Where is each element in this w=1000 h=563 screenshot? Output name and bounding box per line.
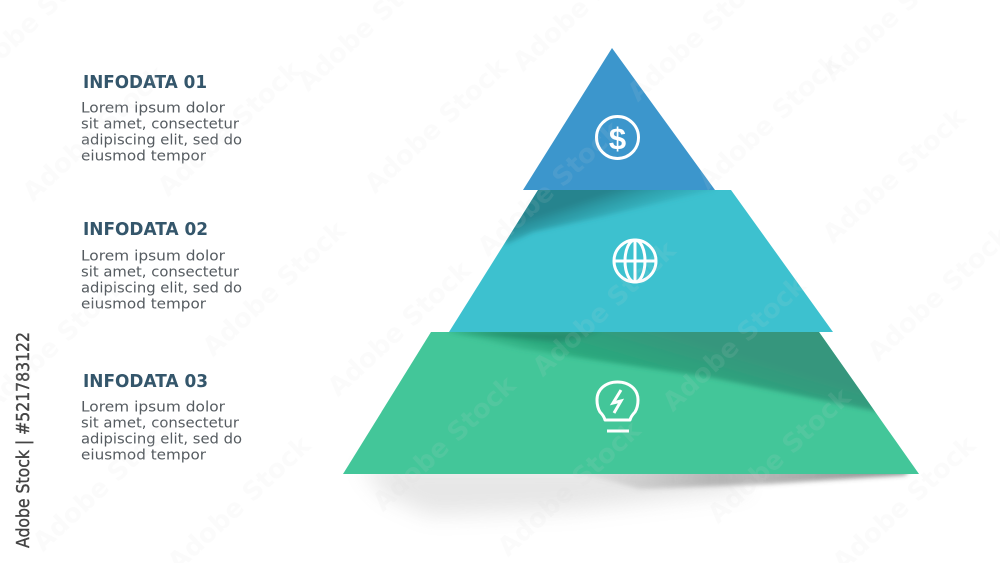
text block: infodata 01 <box>81 72 242 164</box>
watermarks: Adobe Stock <box>657 270 812 418</box>
text block: infodata 01: INFODATA 01 <box>83 72 207 93</box>
text block: infodata 02: INFODATA 02 <box>83 219 208 240</box>
text block: infodata 03: INFODATA 03 <box>83 371 208 392</box>
pyramid level 1: blue <box>523 48 715 190</box>
text block: infodata 02: adipiscing elit, sed do <box>81 280 242 296</box>
watermarks: Adobe Stock <box>152 55 307 203</box>
watermarks: Adobe Stock <box>197 215 352 363</box>
text block: infodata 03: adipiscing elit, sed do <box>81 432 242 448</box>
watermarks: Adobe Stock <box>702 382 857 530</box>
text block: infodata 01: sit amet, consectetur <box>81 116 239 132</box>
watermarks: Adobe Stock <box>322 255 477 403</box>
cast shadow on teal level <box>504 190 708 245</box>
icon: globe <box>614 240 656 282</box>
watermarks: Adobe Stock <box>527 235 682 383</box>
icon: dollar coin <box>596 116 638 158</box>
text block: infodata 01: adipiscing elit, sed do <box>81 132 242 148</box>
floor shadow <box>360 465 912 515</box>
icon: dollar coin: $ <box>609 121 626 156</box>
text block: infodata 03: eiusmod tempor <box>81 448 206 464</box>
text block: infodata 02: Lorem ipsum dolor <box>81 248 225 264</box>
vertical stock id label: Adobe Stock | #521783122 <box>13 332 34 548</box>
text block: infodata 03: Lorem ipsum dolor <box>81 400 225 416</box>
cast shadow on green level <box>449 325 880 412</box>
text block: infodata 03 <box>81 371 242 464</box>
watermarks: Adobe Stock <box>472 115 627 263</box>
icon: light bulb <box>597 382 638 431</box>
watermarks: Adobe Stock <box>359 52 514 200</box>
text block: infodata 02: sit amet, consectetur <box>81 264 239 280</box>
watermarks: Adobe Stock <box>17 60 172 208</box>
text block: infodata 01: eiusmod tempor <box>81 148 206 164</box>
watermarks: Adobe Stock <box>492 415 647 563</box>
text block: infodata 01: Lorem ipsum dolor <box>81 100 225 116</box>
watermarks: Adobe Stock <box>817 102 972 250</box>
pyramid level 3: green <box>343 325 919 474</box>
watermarks: Adobe Stock <box>692 48 847 196</box>
pyramid level 2: teal <box>449 183 833 332</box>
text block: infodata 03: sit amet, consectetur <box>81 416 239 432</box>
watermarks: Adobe Stock <box>367 370 522 518</box>
text block: infodata 02 <box>81 219 242 312</box>
text block: infodata 02: eiusmod tempor <box>81 296 206 312</box>
watermarks: Adobe Stock <box>27 410 182 558</box>
